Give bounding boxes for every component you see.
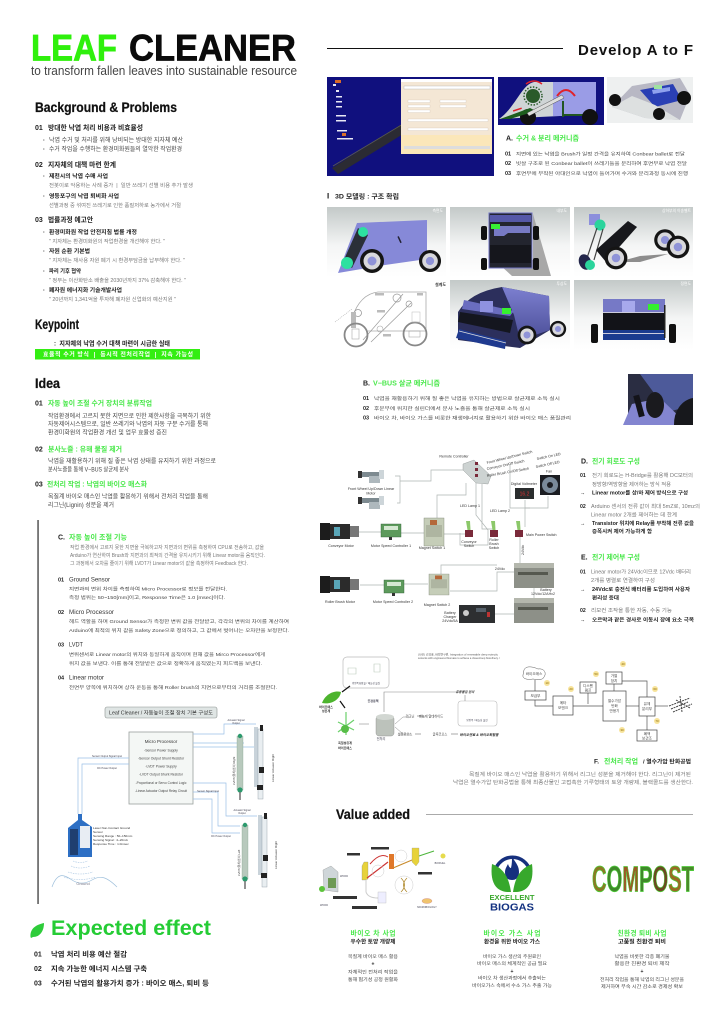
panel: idea list: 01 bbox=[35, 400, 43, 408]
panel: compost text: + bbox=[641, 969, 644, 975]
diagram: hydrothermal carbonization process: 장치 bbox=[611, 678, 617, 683]
panel: upper transmission view: 상하부의 이송벨트 bbox=[662, 208, 692, 213]
diagram: biomass pretreatment flow bbox=[319, 657, 499, 750]
panel: D electric circuit: Transistor 위치에 Relay를 부착해 전류 값을 bbox=[592, 519, 694, 527]
panel: background list: 폐자원 에너지화 기술개발사업 bbox=[49, 286, 122, 294]
diagram: hydrothermal carbonization process: 60 bbox=[653, 687, 657, 691]
panel: blueprint sketch: 설계도 bbox=[435, 281, 446, 287]
citation bbox=[418, 652, 500, 660]
citation: (사진) 김경호, 바일연구원, Integration of renewable deep eutectic bbox=[418, 652, 499, 656]
diagram: auto height control structure: Leaf Cleaner / 자동높이 조절 장치 기본 구성도 bbox=[109, 708, 213, 716]
diagram: auto height control structure: Sensor bbox=[93, 830, 103, 834]
wiring diagram: Switch bbox=[489, 546, 499, 550]
panel: idea list: 02 bbox=[35, 446, 43, 454]
panel: background list: · bbox=[43, 249, 45, 255]
panel: C height adjust text: LVDT bbox=[69, 642, 83, 648]
panel: E electric control: 02 bbox=[580, 608, 586, 614]
panel: E electric control bbox=[580, 552, 694, 624]
wiring diagram: Switch bbox=[464, 544, 474, 548]
F text bbox=[453, 771, 693, 786]
panel: biogas text: 바이오 가스 사업 bbox=[484, 928, 540, 938]
B text: 후문부에 위치한 실린더에서 분사 노즐을 통해 살균제로 소독 실시 bbox=[374, 405, 530, 412]
wiring diagram: Roller bbox=[489, 538, 499, 542]
A text: 02 bbox=[505, 161, 511, 167]
panel: idea list: 작업환경에서 고르지 못한 지면으로 인한 제한사항을 극복하기 위한 bbox=[48, 412, 211, 420]
heading: B: B. bbox=[363, 380, 370, 388]
diagram: hydrothermal carbonization process: 반응기 bbox=[610, 708, 619, 713]
heading: background and problems: Background & Problems bbox=[35, 100, 177, 115]
panel: D electric circuit bbox=[580, 456, 700, 535]
panel: C height adjust text: Micro Processor bbox=[69, 610, 114, 616]
expected effect list: 03 bbox=[34, 980, 42, 988]
panel: D electric circuit: 전기 회로도 구성 bbox=[592, 456, 640, 466]
citation: solvents with engineered biomass to achieve a closed-loop biorefinery. / bbox=[418, 656, 500, 660]
keypoint text: : 지자체의 낙엽 수거 대책 마련이 시급한 실태 bbox=[54, 338, 170, 348]
panel: biochar text bbox=[348, 928, 398, 983]
panel: biochar text: + bbox=[372, 962, 375, 968]
heading: A bbox=[506, 134, 580, 142]
panel: internal view: 내부도 bbox=[557, 208, 568, 213]
diagram: biomass pretreatment flow: 공정용액 bbox=[367, 698, 379, 703]
diagram: auto height control structure: Laser Non-Contact Ground bbox=[93, 826, 130, 830]
diagram: biochar process bbox=[319, 847, 446, 909]
panel: biogas text: 바이오 차 생산과정에서 추출되는 bbox=[478, 974, 546, 982]
panel: E electric control: E. bbox=[581, 554, 588, 562]
panel: biogas text: + bbox=[511, 969, 514, 975]
diagram: biomass pretreatment flow: 리그닌 bbox=[406, 714, 414, 718]
panel: C height adjust text: 03 bbox=[58, 642, 64, 648]
diagram: auto height control structure: -Sensor Output Shunt Resistor bbox=[138, 756, 185, 760]
diagram: auto height control structure: Linear Actuator Right bbox=[271, 754, 275, 782]
diagram: auto height control structure: Sensing Signal : 4~20mA bbox=[93, 838, 129, 842]
panel: background list: · bbox=[43, 174, 45, 180]
heading: B: V−BUS 살균 메커니즘 bbox=[373, 378, 441, 388]
title: CLEANER bbox=[129, 28, 296, 68]
wiring diagram: Digital Voltmeter bbox=[511, 482, 538, 486]
wiring diagram: Battery bbox=[444, 611, 456, 615]
panel: biochar text: 바이오 차 사업 bbox=[350, 928, 396, 938]
panel: compost text bbox=[600, 928, 684, 990]
diagram: auto height control structure: Sensor Output Signal Input bbox=[92, 755, 122, 758]
expected effect list: 지속 가능한 에너지 시스템 구축 bbox=[51, 964, 148, 973]
logo: excellent biogas: BIOGAS bbox=[490, 902, 534, 914]
image: nozzle closeup bbox=[623, 374, 693, 425]
panel: biochar text: 자체적인 전처리 작업을 bbox=[348, 968, 398, 976]
wiring diagram: Switch On LED bbox=[536, 452, 561, 461]
wiring diagram: Roller Brush Motor bbox=[325, 600, 356, 604]
wiring diagram: Conveyor Motor bbox=[328, 544, 355, 548]
diagram: auto height control structure: Response Time : 1.0msec bbox=[93, 842, 129, 846]
panel: biogas text: 바이오가스 속에서 수소 가스 추출 가능 bbox=[472, 982, 552, 989]
panel: C height adjust text: Arduino에 최적의 위치 값을 Safety Zone으로 정의하고, 그 값에서 벗어나는 오차만을 보정한다. bbox=[69, 627, 289, 634]
diagram: hydrothermal carbonization process: 바이오매스 bbox=[526, 671, 543, 676]
logo: compost: COMPOST bbox=[592, 858, 694, 900]
diagram: biochar process: BIOFUEL bbox=[435, 862, 446, 865]
diagram: hydrothermal carbonization process: 보관조 bbox=[642, 736, 653, 740]
B text: 03 bbox=[363, 416, 369, 422]
B text: 02 bbox=[363, 406, 369, 412]
wiring diagram: Charger bbox=[444, 615, 457, 619]
keypoint green bar: 효율적 수거 방식 | 동시적 전처리작업 | 지속 가능성 bbox=[43, 350, 193, 358]
wiring diagram: Main Power Switch bbox=[526, 533, 557, 537]
diagram: biomass pretreatment flow: 바이오매스 bbox=[319, 704, 333, 709]
panel: C height adjust text: Arduino가 연산하여 Brush와 지면과의 최적의 간격을 유지시키기 위해 Linear motor를 움직인다. bbox=[70, 552, 265, 559]
panel: background list: 영등포구의 낙엽 퇴비화 사업 bbox=[49, 192, 119, 200]
panel: background list: 파리 기후 협약 bbox=[49, 267, 81, 275]
wiring diagram: Magnet Switch 2 bbox=[424, 603, 450, 607]
panel: D electric circuit: → bbox=[580, 490, 585, 496]
panel: background list: · bbox=[43, 269, 45, 275]
diagram: auto height control structure: Ground bbox=[76, 881, 90, 886]
wiring diagram: Remote Controller bbox=[439, 454, 469, 458]
panel: E electric control: → bbox=[580, 618, 585, 624]
panel: idea list: 전처리 작업 : 낙엽의 바이오 매스화 bbox=[47, 480, 148, 488]
diagram: hydrothermal carbonization process: 50 bbox=[594, 672, 598, 676]
panel: C height adjust text: 자동 높이 조절 기능 bbox=[69, 532, 128, 542]
diagram: biomass pretreatment flow: 글루코오스 bbox=[433, 732, 447, 736]
wiring diagram: Front Wheel Up/Down Linear bbox=[348, 487, 395, 491]
panel: compost text: 제거하여 부숙 시간 감소로 경제성 확보 bbox=[601, 983, 683, 990]
heading: develop A to F: Develop A to F bbox=[578, 42, 693, 59]
diagram: biomass pretreatment flow: 바이오연료 & 바이오화합물 bbox=[460, 733, 499, 737]
diagram: hydrothermal carbonization process: 40 bbox=[621, 662, 625, 666]
wiring diagram: Motor bbox=[366, 492, 376, 496]
panel: C height adjust text: 01 bbox=[58, 578, 64, 584]
diagram: biomass pretreatment flow: 목질섬유계 bbox=[338, 740, 352, 745]
diagram: hydrothermal carbonization process: 가열 bbox=[611, 673, 617, 678]
panel: background list: 02 bbox=[35, 162, 43, 169]
B text bbox=[363, 395, 571, 422]
panel: E electric control: 01 bbox=[580, 570, 586, 576]
diagram: hydrothermal carbonization process: 유체 bbox=[644, 701, 650, 706]
panel: upper transmission view bbox=[574, 207, 693, 277]
panel: E electric control: 24Vdc로 충전식 배터리를 도입하여 사용자 bbox=[592, 585, 690, 593]
panel: C height adjust text: 위치 값을 보낸다. 이를 통해 전달받은 값으로 정확하게 움직였는지 피드백을 보낸다. bbox=[69, 660, 262, 667]
heading: idea: Idea bbox=[35, 376, 60, 391]
A text: 01 bbox=[505, 151, 511, 157]
diagram: auto height control structure: Output bbox=[232, 722, 240, 725]
diagram: auto height control structure bbox=[52, 707, 278, 889]
panel: D electric circuit: 정방향/역방향을 제어하는 방식 적용 bbox=[592, 481, 671, 488]
diagram: biomass pretreatment flow: 방향족 / 페놀성 물질 bbox=[466, 718, 488, 722]
wiring diagram: Fan bbox=[546, 470, 552, 474]
diagram: auto height control structure: Actuator Signal bbox=[228, 719, 245, 722]
panel: idea list: 분사노즐을 통해 V−BUS 살균제 분사 bbox=[48, 466, 129, 474]
A text: 빗살 구조로 된 Conbear ballet이 쓰레기들을 분리하여 후면부로 낙엽 전달 bbox=[516, 160, 687, 167]
wiring diagram: Switch Off LED bbox=[535, 460, 560, 469]
diagram: auto height control structure: Actuator Signal bbox=[234, 809, 251, 812]
heading: B bbox=[363, 378, 441, 388]
wiring diagram: 16.2 bbox=[520, 492, 530, 498]
wiring diagram: LED Lamp 1 bbox=[460, 504, 480, 508]
panel: biogas text: 바이오 가스 생산의 주원료인 bbox=[483, 953, 541, 960]
panel: background list: " 정부는 이산화탄소 배출을 2030년까지 37% 감축해야 한다. " bbox=[49, 277, 186, 284]
diagram: biochar process: WOOD bbox=[340, 875, 348, 878]
diagram: biochar process: MICROBIOLOGY bbox=[417, 906, 437, 909]
panel: background list: " 지자체는 환경미화원의 작업환경을 개선해야 한다. " bbox=[49, 238, 165, 245]
panel: compost text: 고품질 친환경 퇴비 bbox=[618, 938, 666, 946]
panel: background list: · bbox=[43, 147, 45, 153]
wiring diagram: 12Vdc/12AHx2 bbox=[531, 592, 555, 596]
panel: background list: · bbox=[43, 138, 45, 144]
diagram: auto height control structure: Micro Processor bbox=[145, 739, 178, 744]
title: LEAF bbox=[31, 28, 117, 68]
panel: side view bbox=[327, 207, 446, 277]
B text: 낙엽을 재활용하기 위해 질 좋은 낙엽을 유지하는 방법으로 살균제로 소독 실시 bbox=[374, 395, 560, 402]
A text: 03 bbox=[505, 171, 511, 177]
panel: idea list: 자동 높이 조절 수거 장치의 분류작업 bbox=[48, 398, 152, 408]
heading: 3D modeling: 3D 모델링 : 구조 확립 bbox=[335, 192, 399, 200]
panel: D electric circuit: Arduino 센서의 전류 값이 최대 5mZ로, 10mz의 bbox=[591, 503, 700, 510]
panel: biochar text: 목질계 바이오 매스 활용 bbox=[348, 953, 398, 960]
panel: background list bbox=[35, 123, 193, 303]
panel: background list: · bbox=[43, 230, 45, 236]
logo: excellent biogas: EXCELLENT bbox=[490, 893, 535, 902]
wiring diagram: Conveyor On/Off Switch bbox=[486, 459, 525, 471]
diagram: hydrothermal carbonization process: 메타 bbox=[560, 700, 567, 705]
diagram: biomass pretreatment flow: 셀룰로오스 bbox=[398, 732, 412, 736]
diagram: auto height control structure: DC Power Output bbox=[211, 835, 231, 838]
panel: idea list: 리그닌(Lignin) 성분을 제거 bbox=[48, 501, 114, 509]
panel: C height adjust text bbox=[58, 532, 289, 691]
panel: internal view bbox=[450, 207, 570, 277]
diagram: auto height control structure: Linear Actuator Right bbox=[274, 841, 278, 869]
panel: biogas text: 환경을 위한 바이오 가스 bbox=[484, 938, 540, 946]
diagram: hydrothermal carbonization process: 모앤크 bbox=[558, 705, 569, 710]
heading: A: 수거 & 분리 메커니즘 bbox=[516, 134, 580, 142]
diagram: biochar process: WOOD bbox=[320, 904, 328, 907]
panel: background list: 환경미화원 작업 안전지침 법률 개정 bbox=[49, 228, 137, 236]
wiring diagram: 24Vdc bbox=[495, 567, 505, 571]
panel: D electric circuit: 전기 회로도는 H-Bridge를 활용해 DC모터의 bbox=[592, 472, 693, 479]
F heading bbox=[594, 756, 691, 766]
diagram: hydrothermal carbonization process bbox=[523, 661, 692, 741]
panel: perspective view bbox=[450, 280, 570, 350]
panel: biochar text: 통해 혐기성 공정 원활화 bbox=[348, 976, 398, 983]
diagram: biomass pretreatment flow: 유용물질 분리 bbox=[456, 690, 475, 694]
diagram: biomass pretreatment flow: 성분계 bbox=[322, 708, 330, 713]
expected effect list: 수거된 낙엽의 활용가치 증가 : 바이오 매스, 퇴비 등 bbox=[51, 978, 210, 988]
wiring diagram: Motor Speed Controller 1 bbox=[371, 544, 411, 548]
diagram: hydrothermal carbonization process: 탄화 bbox=[611, 703, 618, 708]
diagram: auto height control structure: -LVDT Output Shunt Resistor bbox=[139, 772, 184, 776]
icon: leaf bbox=[30, 923, 44, 938]
diagram: auto height control structure: -Linear Actuator Output Relay Circuit bbox=[135, 789, 187, 793]
wiring diagram: LED Lamp 2 bbox=[490, 509, 510, 513]
panel: background list: 선별과정 중 섞여진 쓰레기로 인한 품질저하로 농가에서 거절 bbox=[49, 202, 181, 209]
A text bbox=[505, 150, 688, 177]
wiring diagram: 24Vdc bbox=[521, 545, 525, 555]
panel: D electric circuit: D. bbox=[581, 458, 588, 466]
heading: keypoint: Keypoint bbox=[35, 317, 79, 332]
panel: side view: 측면도 bbox=[433, 208, 444, 213]
panel: blueprint sketch bbox=[335, 281, 446, 346]
panel: idea list: 03 bbox=[35, 482, 43, 488]
F heading: 전처리 작업 bbox=[604, 756, 638, 766]
diagram: auto height control structure: -LVDT Power Supply bbox=[145, 764, 177, 768]
keypoint green bar bbox=[35, 349, 200, 360]
heading: value added: Value added bbox=[336, 807, 410, 822]
diagram: auto height control structure: DC Power Output bbox=[97, 767, 117, 770]
panel: idea list bbox=[35, 398, 216, 509]
panel: E electric control: 리모컨 조작을 통한 자동, 수동 기능 bbox=[591, 607, 672, 614]
panel: C height adjust text: 02 bbox=[58, 610, 64, 616]
panel: C height adjust text: 지면과의 변위 차이를 측정하여 Micro Processor로 정보를 전달한다. bbox=[69, 586, 227, 592]
F text: 목질계 바이오 매스인 낙엽을 활용하기 위해서 리그닌 성분을 제거해야 한다. 리그닌이 제거된 bbox=[469, 771, 691, 778]
diagram: biomass pretreatment flow: 바이오매스 bbox=[338, 745, 352, 750]
diagram: biomass pretreatment flow: 페놀계 알데하이드 bbox=[419, 714, 443, 718]
wiring diagram: Roller Brush On/Off Switch bbox=[486, 467, 529, 478]
panel: C height adjust text: 04 bbox=[58, 676, 65, 682]
panel: D electric circuit: 02 bbox=[580, 504, 586, 510]
logo: excellent biogas bbox=[490, 857, 535, 914]
diagram: hydrothermal carbonization process: 폐액 bbox=[644, 731, 650, 736]
A text: 지면에 있는 낙엽을 Brush가 일정 간격을 유지하여 Conbear ballet로 전달 bbox=[516, 150, 685, 157]
panel: C height adjust text: C. bbox=[58, 534, 65, 542]
panel: C height adjust text: 그 과정에서 오차를 줄이기 위해 LVDT가 Linear motor의 값을 측정하여 Feedback 한다. bbox=[70, 560, 248, 567]
panel: biogas text: 바이오 매스의 체계적인 공급 필요 bbox=[477, 960, 547, 967]
panel: idea list: 낙엽을 재활용하기 위해 질 좋은 낙엽 상태를 유지하기 위한 과정으로 bbox=[48, 457, 216, 465]
panel: background list: · bbox=[43, 194, 45, 200]
F heading: / 열수가압 탄화공법 bbox=[643, 758, 691, 766]
panel: idea list: 분사노즐 : 유해 물질 제거 bbox=[48, 444, 122, 454]
panel: D electric circuit: Linear motor 2개를 제어하는 데 한계 bbox=[591, 512, 677, 518]
diagram: hydrothermal carbonization process: 디스펜 bbox=[583, 683, 594, 688]
F text: 낙엽은 열수가압 탄화공법을 통해 최종산물인 고접촉한 기루형태의 토양 개량제, 블랙콜드를 생산한다. bbox=[453, 779, 693, 786]
panel: compost text: 낙엽을 비롯한 각종 폐기물 bbox=[614, 953, 670, 960]
panel: idea list: 자동제어시스템으로, 일반 쓰레기와 낙엽의 자동 구분 수거를 통해 bbox=[48, 420, 208, 428]
panel: background list: 03 bbox=[35, 217, 43, 224]
panel: compost text: 친환경 퇴비 사업 bbox=[618, 928, 666, 938]
panel: C height adjust text: 전면부 양쪽에 위치하여 상하 운동을 통해 Roller brush의 지면으로부터의 거리를 조절한다. bbox=[69, 684, 277, 691]
panel: compost text: 활용한 친환경 퇴비 제작 bbox=[614, 960, 670, 967]
wiring diagram: Battery bbox=[540, 588, 552, 592]
wiring diagram: Front Wheel Up/Down Switch bbox=[486, 450, 533, 465]
panel: background list: · bbox=[43, 288, 45, 294]
panel: background list: 01 bbox=[35, 125, 43, 132]
F heading: F. bbox=[594, 758, 599, 766]
panel: background list: 낙엽 수거 및 처리를 위해 낭비되는 방대한 지자체 예산 bbox=[49, 136, 183, 144]
wiring diagram: 24Vdc/5A bbox=[442, 619, 458, 623]
panel: C height adjust text: 측정 범위는 50~150[mm]이고, Response Time은 1.0 [msec]이다. bbox=[69, 594, 225, 601]
A text: 후면부에 부착된 아대인으로 낙엽이 들어가며 수거와 분리과정 동시에 진행 bbox=[516, 170, 688, 177]
diagram: auto height control structure: Output bbox=[238, 812, 246, 815]
panel: background list: 전봇이로 악용하는 사례 증가 | 일반 쓰레기 선별 비용 추가 발생 bbox=[49, 182, 193, 189]
wiring diagram: Brush bbox=[489, 542, 499, 546]
panel: C height adjust text: 변위센서로 Linear motor의 위치와 동일하게 움직이며 현재 값을 Mirco Processor에게 bbox=[69, 651, 265, 658]
panel: background list: 자원 순환 기본법 bbox=[49, 247, 90, 255]
diagram: hydrothermal carbonization process: 분리부 bbox=[642, 706, 653, 711]
diagram: auto height control structure: Sensor Signal Input bbox=[197, 790, 219, 793]
B text: 바이오 차, 바이오 가스를 비롯한 재생에너지로 활용하기 위한 바이오 매스 품질관리 bbox=[374, 414, 571, 422]
panel: E electric control: 오르막과 같은 경사로 이동시 장애 요소 극복 bbox=[592, 616, 694, 624]
panel: D electric circuit: 증폭시켜 제어 가능하게 함 bbox=[592, 527, 652, 535]
wiring diagram bbox=[320, 450, 561, 623]
title bbox=[31, 28, 296, 68]
panel: C height adjust text: 헤드 역할을 하며 Ground Sensor가 측정한 변위 값을 전달받고, 각각의 변위의 차이를 계산하여 bbox=[69, 618, 289, 625]
section rule: C bbox=[37, 520, 39, 904]
expected effect list: 02 bbox=[34, 966, 42, 973]
panel: E electric control: → bbox=[580, 587, 585, 593]
panel: D electric circuit: Linear motor를 상/하 제어 방식으로 구성 bbox=[592, 488, 688, 496]
diagram: hydrothermal carbonization process: 열수가압 bbox=[608, 698, 622, 703]
diagram: biomass pretreatment flow: 방향족화합물 / 페놀성 물질 bbox=[352, 681, 381, 685]
wiring diagram: Motor Speed Controller 2 bbox=[373, 600, 413, 604]
image: 3D render of machine bbox=[607, 77, 693, 123]
panel: idea list: 환경미화원의 작업환경 개선 및 업무 효율성 증진 bbox=[48, 428, 167, 436]
panel: idea list: 목질계 바이오 매스인 낙엽을 활용하기 위해서 전처리 작업을 통해 bbox=[48, 492, 208, 500]
panel: C height adjust text: Linear motor bbox=[69, 676, 104, 682]
panel: E electric control: Linear motor가 24Vdc이므로 12Vdc 배터리 bbox=[591, 568, 691, 576]
panel: background list: 지자체의 대책 마련 한계 bbox=[48, 160, 116, 169]
panel: C height adjust text: Ground Sensor bbox=[69, 578, 110, 584]
panel: biogas text bbox=[472, 928, 552, 989]
panel: background list: " 지자체는 재사용 자원 폐기 시 환경부담금을 납부해야 한다. " bbox=[49, 257, 185, 264]
panel: D electric circuit: → bbox=[580, 521, 585, 527]
panel: background list: " 20년까지 1,341억을 투자해 폐자원 신업화의 예산지원 " bbox=[49, 296, 176, 303]
panel: E electric control: 전기 제어부 구성 bbox=[592, 552, 640, 562]
panel: E electric control: 편리성 증대 bbox=[592, 594, 619, 602]
diagram: biomass pretreatment flow: 전처리 bbox=[377, 736, 385, 741]
diagram: auto height control structure: LVDT(위치)센서 Right bbox=[231, 757, 236, 785]
image: blue collection diagram bbox=[498, 77, 604, 125]
panel: perspective view: 투상도 bbox=[557, 281, 568, 286]
diagram: auto height control structure: -Sensor Power Supply bbox=[144, 748, 178, 752]
diagram: hydrothermal carbonization process: 보급부 bbox=[531, 693, 541, 698]
diagram: hydrothermal carbonization process: 70 bbox=[655, 719, 659, 723]
wiring diagram: Conveyor bbox=[461, 540, 477, 544]
image: CAD software screen bbox=[327, 77, 494, 176]
panel: background list: 법률과정 예고안 bbox=[48, 215, 94, 224]
panel: background list: 수거 작업을 수행하는 환경미화원들의 열악한 작업환경 bbox=[49, 145, 182, 153]
wiring diagram: Magnet Switch 1 bbox=[419, 546, 445, 550]
diagram: auto height control structure: -Proportional or Servo Control Logic bbox=[136, 781, 187, 785]
diagram: auto height control structure: LVDT(위치)센서 Left bbox=[236, 850, 241, 876]
panel: E electric control: 2개를 병렬로 연결하여 구성 bbox=[591, 577, 655, 584]
diagram: hydrothermal carbonization process: 20 bbox=[569, 687, 573, 691]
panel: background list: 방대한 낙엽 처리 비용과 비효율성 bbox=[48, 123, 143, 132]
subtitle: to transform fallen leaves into sustainable resource bbox=[31, 64, 297, 78]
expected effect list: 01 bbox=[34, 952, 42, 958]
panel: front view: 정면도 bbox=[681, 281, 692, 286]
diagram: hydrothermal carbonization process: 펌프 bbox=[585, 688, 592, 692]
heading: expected effect: Expected effect bbox=[51, 917, 211, 940]
panel: C height adjust text: 작업 환경에서 고르지 못한 지면을 극복하고자 지면과의 변위를 측정하여 CPU로 전송하고, 값을 bbox=[70, 544, 264, 551]
panel: front view bbox=[574, 280, 693, 350]
expected effect list bbox=[34, 950, 210, 988]
heading: 3D modeling bbox=[328, 192, 399, 200]
panel: D electric circuit: 01 bbox=[580, 473, 586, 479]
expected effect list: 낙엽 처리 비용 예산 절감 bbox=[51, 950, 128, 958]
heading: A: A. bbox=[506, 136, 513, 142]
B text: 01 bbox=[363, 396, 369, 402]
diagram: hydrothermal carbonization process: 10 bbox=[545, 681, 549, 685]
diagram: hydrothermal carbonization process: 30 bbox=[620, 728, 624, 732]
diagram: auto height control structure: Sensing Range : 50~150mm bbox=[93, 834, 133, 838]
panel: biochar text: 우수한 토양 개량제 bbox=[350, 938, 396, 946]
panel: compost text: 전처리 작업을 통해 낙엽의 리그닌 성분을 bbox=[600, 976, 684, 983]
panel: background list: 제천시의 낙엽 수매 사업 bbox=[49, 172, 108, 180]
